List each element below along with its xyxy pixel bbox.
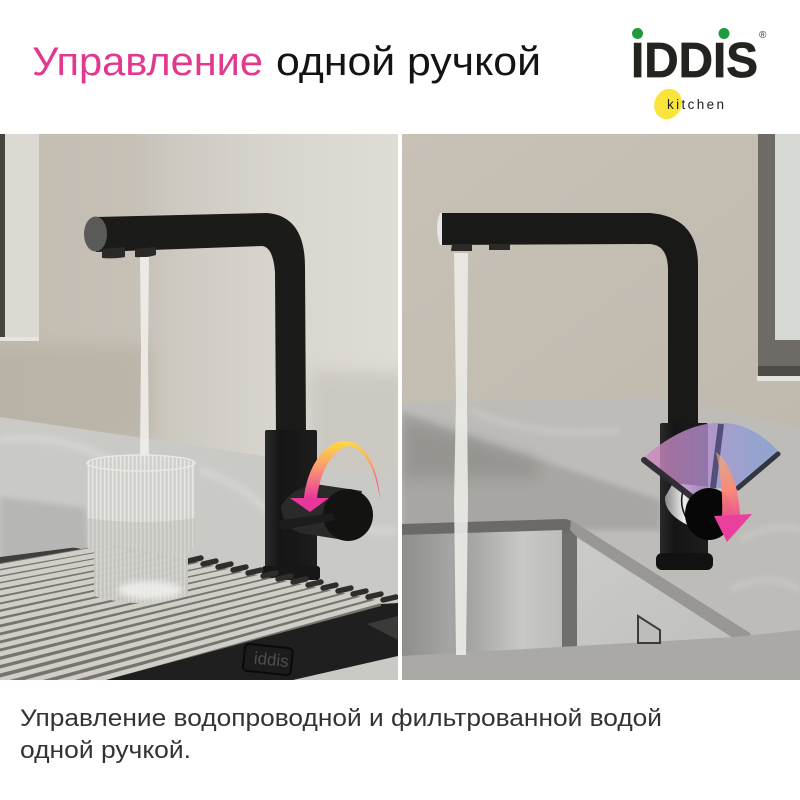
faucet neck and spout	[440, 213, 698, 428]
glass body	[87, 455, 195, 603]
logo green dot right	[718, 28, 730, 39]
counter edge	[570, 520, 751, 638]
faucet aerators	[102, 247, 156, 258]
title	[32, 40, 541, 84]
arrow head	[290, 498, 329, 512]
sink corner	[562, 530, 577, 650]
basin highlight	[367, 616, 398, 640]
right window glass	[775, 134, 800, 340]
title: одной ручкой	[276, 40, 541, 84]
right window sill	[757, 376, 800, 381]
glass flutes	[87, 455, 195, 603]
right wall	[402, 134, 800, 434]
handle lever	[284, 513, 334, 528]
right counter dark zone	[402, 412, 660, 530]
faucet handle chrome	[665, 483, 730, 530]
front counter	[402, 630, 800, 680]
glass	[87, 455, 195, 603]
faucet handle	[279, 484, 373, 541]
sink interior back wall	[402, 530, 562, 656]
faucet neck and spout	[96, 213, 306, 435]
logo wordmark: IDDIS	[631, 34, 758, 88]
body text: одной ручкой.	[20, 737, 191, 764]
rack base	[0, 544, 381, 682]
handle face	[323, 489, 373, 541]
left counter veins	[8, 438, 372, 532]
handle cylinder	[281, 484, 362, 541]
logo registered mark: ®	[759, 30, 767, 41]
faucet spout tip	[437, 213, 442, 245]
right faucet	[437, 213, 730, 570]
left sink basin	[85, 603, 398, 680]
selector fan	[642, 423, 780, 498]
logo: IDDIS kitchen	[631, 28, 767, 124]
fan left bar	[644, 460, 693, 498]
logo green dot left	[632, 28, 643, 39]
left water stream	[140, 257, 149, 462]
faucet spout end	[84, 216, 107, 252]
panel: left photo, filtered water	[0, 134, 410, 707]
faucet handle face	[685, 488, 733, 540]
right counter	[402, 397, 800, 680]
right counter dark veins	[402, 420, 540, 480]
left counter shade	[0, 497, 90, 560]
body text	[20, 705, 662, 764]
left wall lower shadow	[0, 345, 150, 440]
left wall	[0, 134, 398, 494]
rack rod ends	[188, 558, 396, 600]
right water stream	[454, 253, 468, 655]
fan left wedge	[642, 423, 717, 498]
faucet body	[660, 423, 708, 555]
left rotation arrow	[290, 441, 380, 512]
left window sill	[0, 337, 39, 341]
right counter veins	[470, 410, 800, 590]
sink logo plate: iddis	[253, 649, 290, 671]
right rotation arrow	[714, 452, 752, 542]
left faucet	[84, 213, 373, 580]
logo yellow blob	[649, 84, 687, 124]
left window dark pane	[0, 134, 5, 337]
fan right bar	[738, 454, 778, 488]
body text: Управление водопроводной и фильтрованной водой	[20, 705, 662, 732]
left window reveal	[5, 134, 39, 337]
arrow arc	[304, 441, 380, 499]
faucet body	[265, 430, 317, 570]
fan middle bar	[713, 424, 721, 488]
arrow head	[714, 514, 752, 542]
arrow arc	[716, 452, 740, 516]
logo kitchen text: kitchen	[667, 97, 724, 112]
glass water	[87, 518, 195, 603]
left counter	[0, 417, 398, 680]
faucet base	[656, 553, 713, 570]
faucet aerators	[451, 244, 510, 251]
sink rim	[402, 519, 571, 535]
right window frame	[758, 134, 800, 366]
rack rods	[0, 548, 381, 680]
sink interior side wall	[575, 537, 732, 647]
panel: right photo, tap water	[402, 134, 800, 680]
drying rack	[0, 548, 398, 680]
glass rim	[87, 455, 195, 471]
sink logo plate	[243, 644, 293, 675]
glass highlight	[118, 581, 182, 599]
sink drain plate	[638, 616, 660, 643]
left wall lower right shade	[310, 370, 398, 478]
fan right wedge	[715, 423, 780, 488]
right window dark band	[758, 366, 800, 376]
left sink rim	[0, 548, 81, 563]
title: Управление	[32, 40, 263, 84]
handle seam	[682, 488, 695, 529]
faucet base	[262, 566, 320, 580]
